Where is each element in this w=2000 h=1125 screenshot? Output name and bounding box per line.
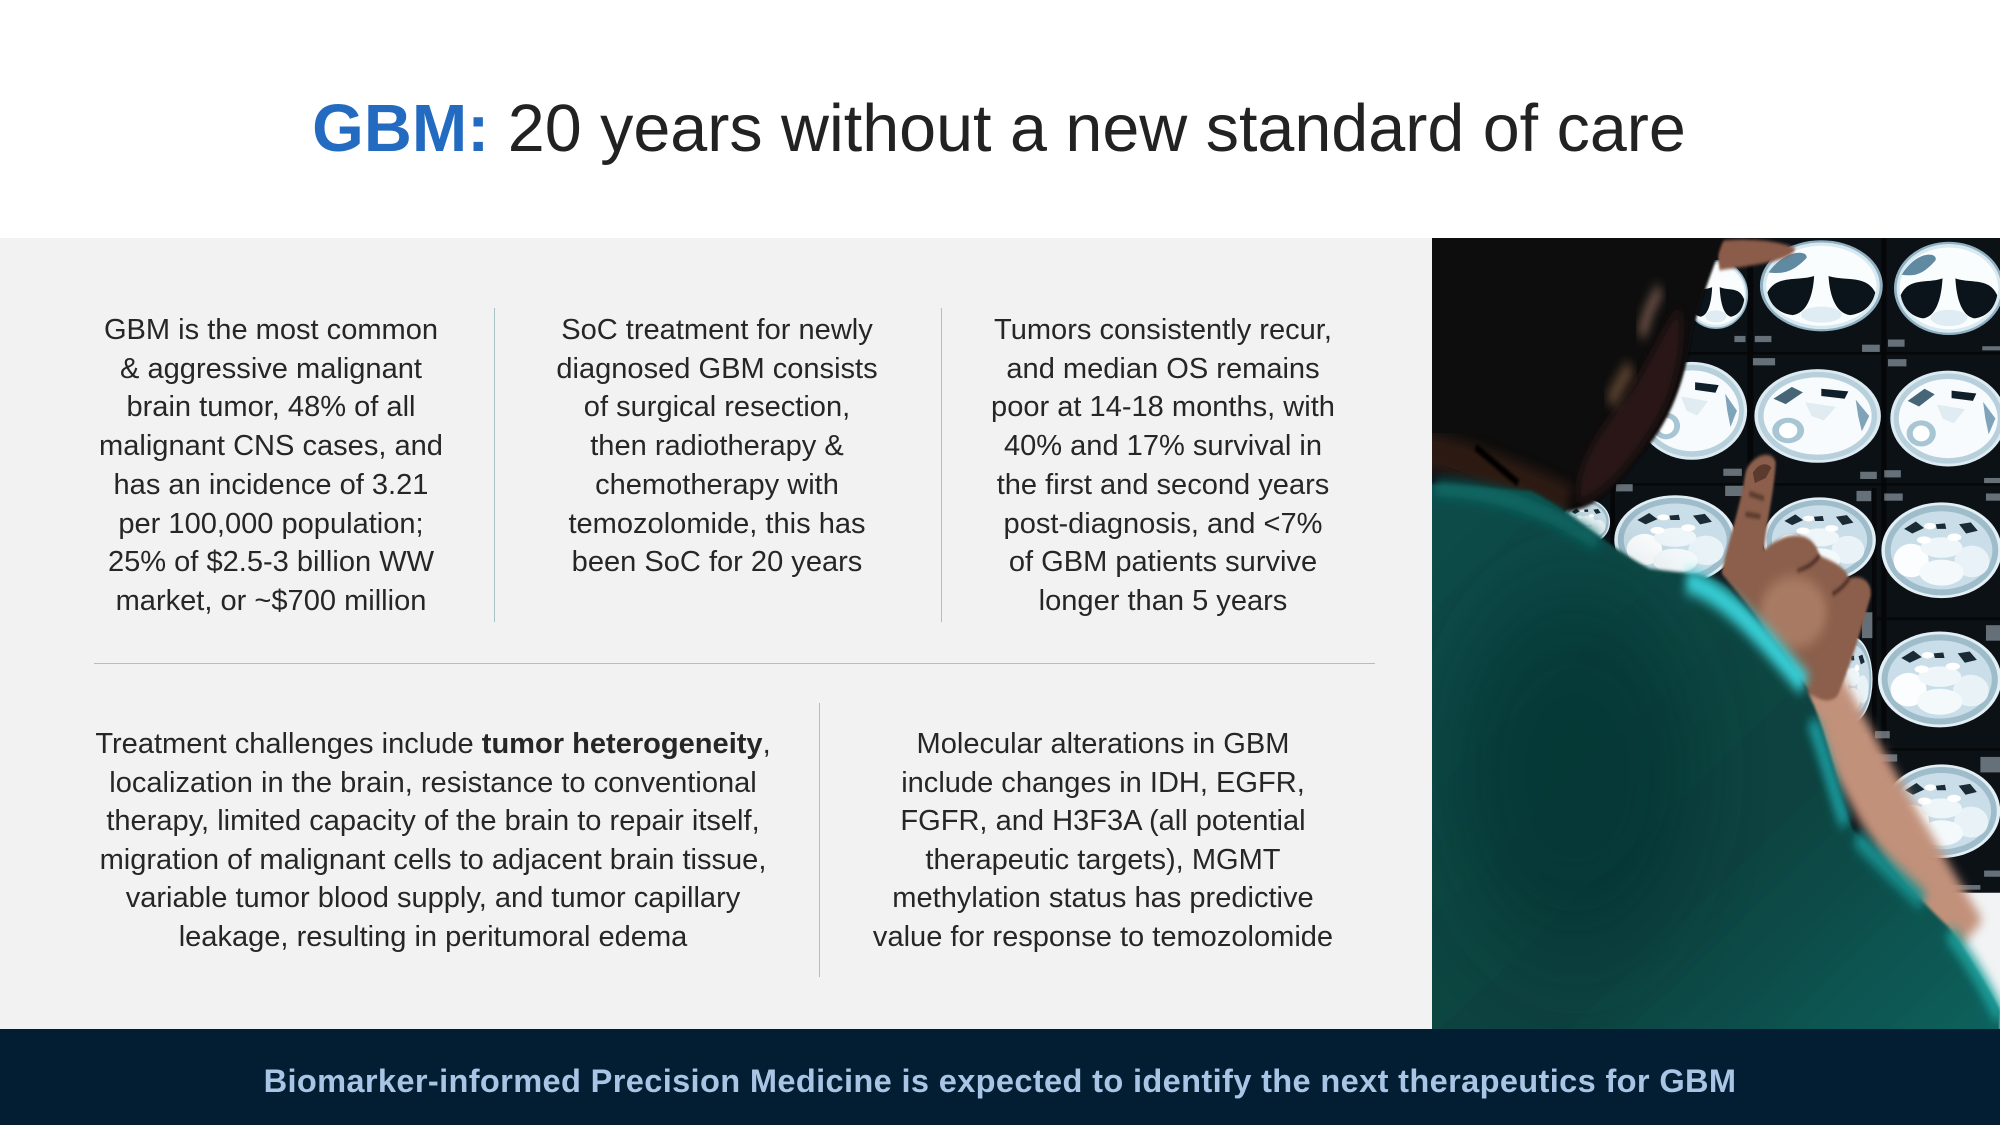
head xyxy=(1420,230,1727,512)
text block: standard of care xyxy=(556,314,878,578)
text block: standard of care: chemotherapy with xyxy=(595,469,839,501)
text block: epidemiology xyxy=(99,314,443,617)
text block: survival: poor at 14-18 months, with xyxy=(991,391,1335,423)
text block: epidemiology: per 100,000 population; xyxy=(118,508,424,540)
text block: molecular alterations: therapeutic targets), MGMT xyxy=(925,844,1281,876)
takeaway banner: Biomarker-informed Precision Medicine is expected to identify the next therapeutics for GBM xyxy=(264,1062,1736,1099)
text block: survival: 40% and 17% survival in xyxy=(1004,430,1322,462)
hand and finger xyxy=(1721,455,1871,701)
raised hand at top xyxy=(1716,240,1795,270)
text block: epidemiology: GBM is the most common xyxy=(104,314,438,346)
text block: survival: and median OS remains xyxy=(1006,353,1320,385)
face side shading xyxy=(1578,307,1682,504)
text block: survival: Tumors consistently recur, xyxy=(994,314,1332,346)
text block: treatment challenges: Treatment challenges include tumor heterogeneity, xyxy=(95,728,771,760)
text block: epidemiology: brain tumor, 48% of all xyxy=(126,391,416,423)
text block: epidemiology: 25% of $2.5-3 billion WW xyxy=(108,546,434,578)
text block: epidemiology: has an incidence of 3.21 xyxy=(114,469,428,501)
panel: key facts xyxy=(0,238,1432,1029)
text block: treatment challenges: migration of malignant cells to adjacent brain tissue, xyxy=(100,844,766,876)
text block: treatment challenges xyxy=(95,728,771,952)
text block: survival: longer than 5 years xyxy=(1039,585,1287,617)
text block: standard of care: of surgical resection, xyxy=(584,391,850,423)
text block: epidemiology: & aggressive malignant xyxy=(120,353,422,385)
text block: standard of care: temozolomide, this has xyxy=(568,508,866,540)
text block: survival: of GBM patients survive xyxy=(1009,546,1317,578)
text block: molecular alterations: value for response to temozolomide xyxy=(873,920,1333,952)
text block: treatment challenges: leakage, resulting in peritumoral edema xyxy=(179,920,687,952)
forearm xyxy=(1816,685,1964,943)
text block: epidemiology: malignant CNS cases, and xyxy=(99,430,443,462)
text block: molecular alterations: FGFR, and H3F3A (all potential xyxy=(900,805,1306,837)
photo: clinician reviewing scans xyxy=(1432,238,2000,1029)
text block: survival: the first and second years xyxy=(997,469,1329,501)
text block: treatment challenges: therapy, limited capacity of the brain to repair itself, xyxy=(106,805,760,837)
text block: standard of care: diagnosed GBM consists xyxy=(556,353,878,385)
scrubs xyxy=(1420,483,2000,1040)
title: GBM: 20 years without a new standard of care xyxy=(312,92,1686,166)
neck and collar line xyxy=(1420,450,1568,504)
text block: survival xyxy=(991,314,1335,617)
text block: standard of care: then radiotherapy & xyxy=(590,430,844,462)
scan wall xyxy=(1420,230,2000,1040)
scrubs highlight xyxy=(1686,581,1805,685)
takeaway banner xyxy=(0,1029,2000,1125)
ear xyxy=(1610,289,1660,403)
text block: molecular alterations xyxy=(873,728,1333,952)
text block: molecular alterations: Molecular alterations in GBM xyxy=(917,728,1289,760)
text block: epidemiology: market, or ~$700 million xyxy=(116,585,426,617)
text block: survival: post-diagnosis, and <7% xyxy=(1004,508,1322,540)
text block: treatment challenges: variable tumor blood supply, and tumor capillary xyxy=(126,882,740,914)
text block: standard of care: SoC treatment for newly xyxy=(561,314,873,346)
text block: treatment challenges: localization in the brain, resistance to conventional xyxy=(109,766,757,798)
text block: molecular alterations: methylation status has predictive xyxy=(892,882,1314,914)
text block: standard of care: been SoC for 20 years xyxy=(572,546,862,578)
light wall xyxy=(1927,893,2000,1040)
text block: molecular alterations: include changes in IDH, EGFR, xyxy=(901,766,1305,798)
